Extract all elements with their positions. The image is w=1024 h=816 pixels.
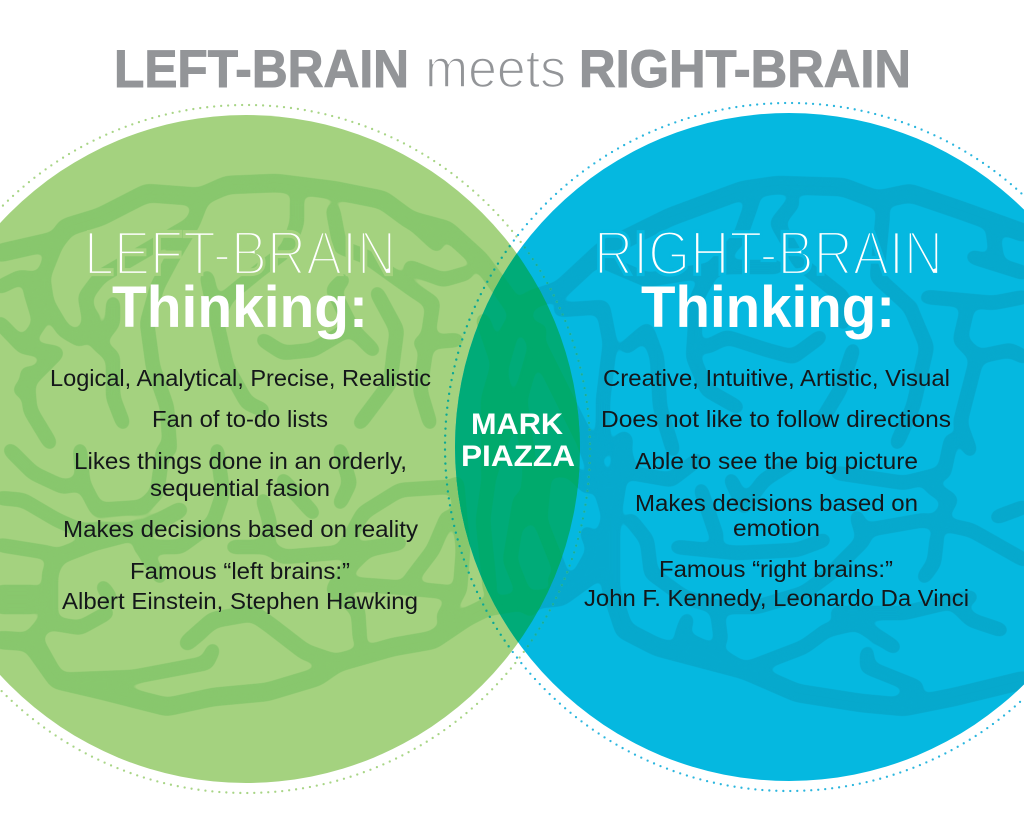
text block: left-brain traits: Fan of to-do lists: [152, 406, 328, 432]
text block: left-brain traits: [50, 365, 431, 614]
center label: name: MARK: [471, 408, 563, 441]
text block: left-brain traits: Famous “left brains:”: [130, 558, 350, 584]
heading: right-brain thinking: [594, 220, 943, 340]
title: [114, 39, 911, 99]
heading: left-brain thinking: [84, 220, 396, 340]
title: meets: [425, 39, 566, 99]
text block: left-brain traits: Logical, Analytical, Precise, Realistic: [50, 365, 431, 391]
text block: left-brain traits: Makes decisions based on reality: [63, 516, 419, 542]
title: LEFT-BRAIN: [114, 40, 409, 99]
text block: right-brain traits: Creative, Intuitive, Artistic, Visual: [603, 365, 950, 391]
text block: right-brain traits: [584, 365, 969, 611]
dotted ring: left circle: [0, 105, 590, 793]
text block: right-brain traits: emotion: [733, 515, 820, 541]
center label: name: [461, 408, 575, 473]
text block: left-brain traits: Likes things done in an orderly,: [74, 448, 407, 474]
text block: left-brain traits: sequential fasion: [150, 475, 330, 501]
center label: name: PIAZZA: [461, 440, 575, 473]
text block: right-brain traits: Does not like to follow directions: [601, 406, 951, 432]
text block: right-brain traits: Famous “right brains:”: [659, 556, 893, 582]
panel: left circle with brain: [0, 115, 518, 783]
heading: right-brain thinking: Thinking:: [641, 275, 895, 340]
panel: overlap lens: [455, 254, 580, 642]
heading: left-brain thinking: LEFT-BRAIN: [84, 220, 396, 288]
text block: right-brain traits: John F. Kennedy, Leonardo Da Vinci: [584, 585, 969, 611]
text block: right-brain traits: Able to see the big picture: [635, 448, 918, 474]
title: RIGHT-BRAIN: [579, 40, 911, 99]
dotted ring: right circle: [445, 103, 1024, 791]
heading: right-brain thinking: RIGHT-BRAIN: [594, 220, 943, 288]
text block: right-brain traits: Makes decisions based on: [635, 490, 918, 516]
panel: right circle with brain: [455, 113, 1024, 781]
text block: left-brain traits: Albert Einstein, Stephen Hawking: [62, 588, 418, 614]
heading: left-brain thinking: Thinking:: [112, 275, 368, 340]
